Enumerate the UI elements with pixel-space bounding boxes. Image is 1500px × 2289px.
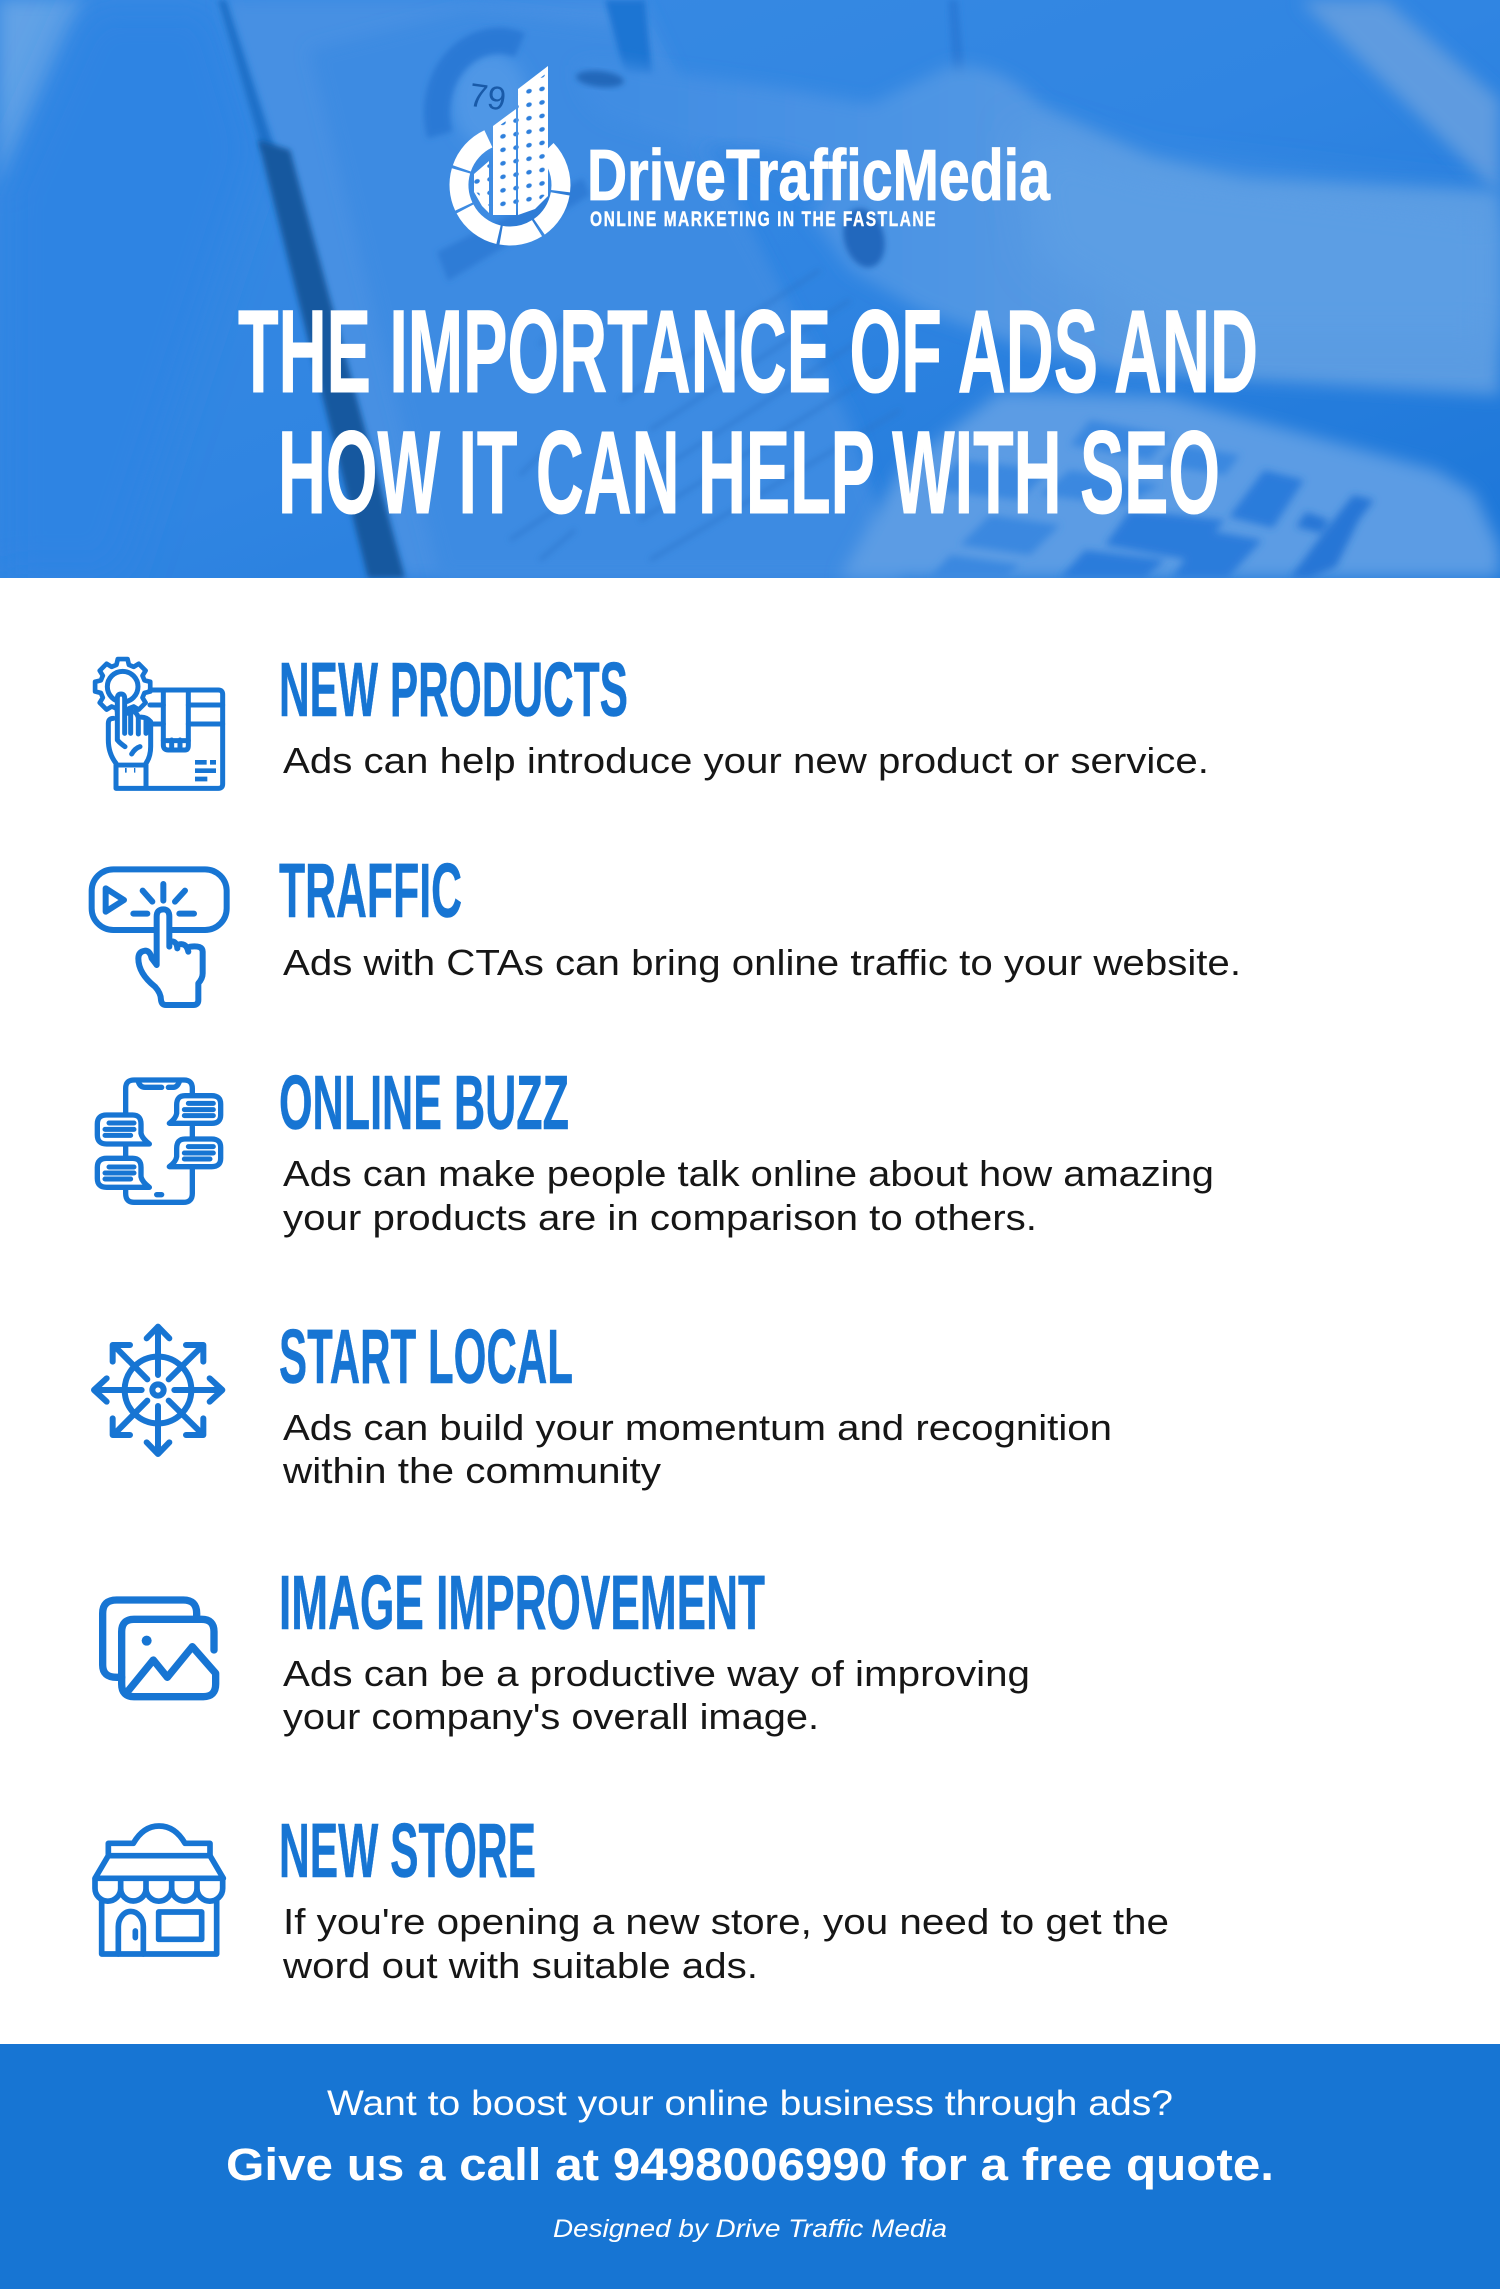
description: Ads can help introduce your new product or service. — [283, 740, 1209, 781]
icon: click on video button — [92, 869, 227, 1005]
description: Ads can build your momentum and recognition — [283, 1407, 1112, 1448]
title — [238, 286, 1258, 539]
footer prompt: Want to boost your online business through ads? — [327, 2084, 1173, 2123]
footer credit: Designed by Drive Traffic Media — [553, 2215, 947, 2243]
description — [283, 1153, 1214, 1238]
description: word out with suitable ads. — [282, 1945, 758, 1986]
icon: phone with chat bubbles — [97, 1080, 221, 1202]
logo mark: buildings in segmented ring — [459, 66, 561, 236]
section: image improvement — [103, 1560, 1030, 1737]
nails and finger shadows — [575, 69, 625, 89]
laptop keyboard — [840, 392, 1500, 578]
heading: ONLINE BUZZ — [279, 1060, 569, 1146]
header photo: hand on laptop in blue duotone — [0, 0, 1500, 578]
logo tagline: ONLINE MARKETING IN THE FASTLANE — [590, 208, 937, 231]
header photo: hand on laptop in blue duotone: 79 — [467, 76, 508, 117]
section: traffic — [92, 848, 1241, 1005]
description: your company's overall image. — [283, 1696, 819, 1737]
section: new store — [95, 1808, 1169, 1986]
page copy lines — [510, 270, 900, 560]
logo — [459, 66, 1051, 236]
description: your products are in comparison to others. — [283, 1197, 1037, 1238]
heading: TRAFFIC — [279, 848, 462, 934]
heading: IMAGE IMPROVEMENT — [279, 1560, 765, 1646]
description: within the community — [282, 1450, 661, 1491]
panel: header with photo background — [0, 0, 1500, 578]
section: new products — [95, 647, 1209, 788]
description: Ads can be a productive way of improving — [283, 1653, 1030, 1694]
description — [282, 1901, 1169, 1986]
section: online buzz — [97, 1060, 1214, 1238]
description — [282, 1407, 1112, 1491]
gauge with score — [452, 52, 528, 148]
description — [283, 1653, 1030, 1737]
icon: storefront — [95, 1826, 223, 1954]
heading: NEW PRODUCTS — [279, 647, 628, 733]
heading: START LOCAL — [279, 1314, 573, 1400]
footer phone call line: Give us a call at 9498006990 for a free quote. — [226, 2139, 1274, 2190]
description: If you're opening a new store, you need to get the — [283, 1901, 1169, 1942]
hand — [578, 62, 1500, 395]
icon: wheel with outward arrows — [94, 1327, 222, 1454]
description: Ads with CTAs can bring online traffic to your website. — [283, 942, 1241, 983]
panel: footer call to action — [0, 2044, 1500, 2289]
section: start local — [94, 1314, 1112, 1491]
icon: gear, hand and parcel — [95, 659, 223, 788]
description: Ads can make people talk online about how amazing — [283, 1153, 1214, 1194]
icon: picture frames — [103, 1600, 216, 1697]
logo wordmark: DriveTrafficMedia — [587, 136, 1051, 216]
heading: NEW STORE — [279, 1808, 536, 1894]
